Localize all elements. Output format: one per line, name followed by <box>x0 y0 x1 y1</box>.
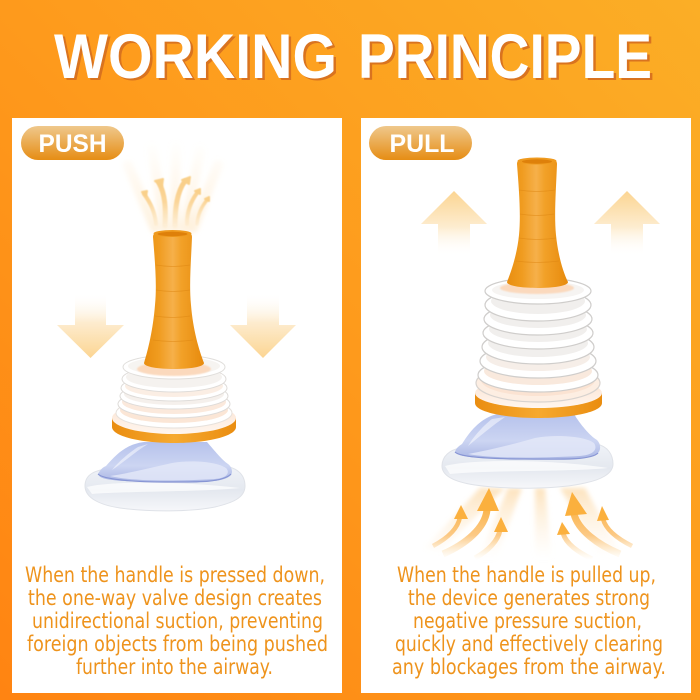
description text: the device generates strong <box>408 586 650 610</box>
device: compressed <box>85 230 245 511</box>
mask <box>442 414 613 488</box>
device: extended <box>442 158 613 488</box>
icon: air flow escaping upward <box>128 145 218 228</box>
title: WORKING <box>56 24 340 94</box>
title <box>54 22 654 94</box>
description text: the one-way valve design creates <box>28 586 322 610</box>
mask <box>85 442 245 511</box>
bellows <box>476 278 600 402</box>
title: PRINCIPLE <box>358 22 652 92</box>
description text: unidirectional suction, preventing <box>32 609 323 633</box>
base ring <box>112 402 236 443</box>
handle <box>500 158 574 294</box>
PUSH badge <box>21 126 124 160</box>
handle <box>137 230 211 376</box>
arrow: left down <box>57 293 124 358</box>
description text <box>25 563 328 679</box>
PUSH badge: PUSH <box>38 130 106 158</box>
arrow: right up <box>594 191 660 256</box>
base ring <box>475 378 602 418</box>
panel background <box>361 118 691 693</box>
icon: air flow drawn into mask <box>425 488 632 560</box>
panel: pull <box>361 118 691 693</box>
arrow: right down <box>230 293 296 358</box>
panel: push <box>12 118 342 693</box>
description text: negative pressure suction, <box>413 609 642 633</box>
PULL badge: PULL <box>390 130 454 158</box>
arrow: left up <box>421 191 487 256</box>
title: WORKING <box>54 22 337 92</box>
PULL badge <box>369 126 472 160</box>
description text: foreign objects from being pushed <box>27 632 328 656</box>
description text: When the handle is pressed down, <box>25 563 325 587</box>
title: PRINCIPLE <box>360 24 654 94</box>
description text: further into the airway. <box>76 655 273 679</box>
panel background <box>12 118 342 693</box>
bellows <box>116 355 232 428</box>
description text <box>392 563 666 679</box>
